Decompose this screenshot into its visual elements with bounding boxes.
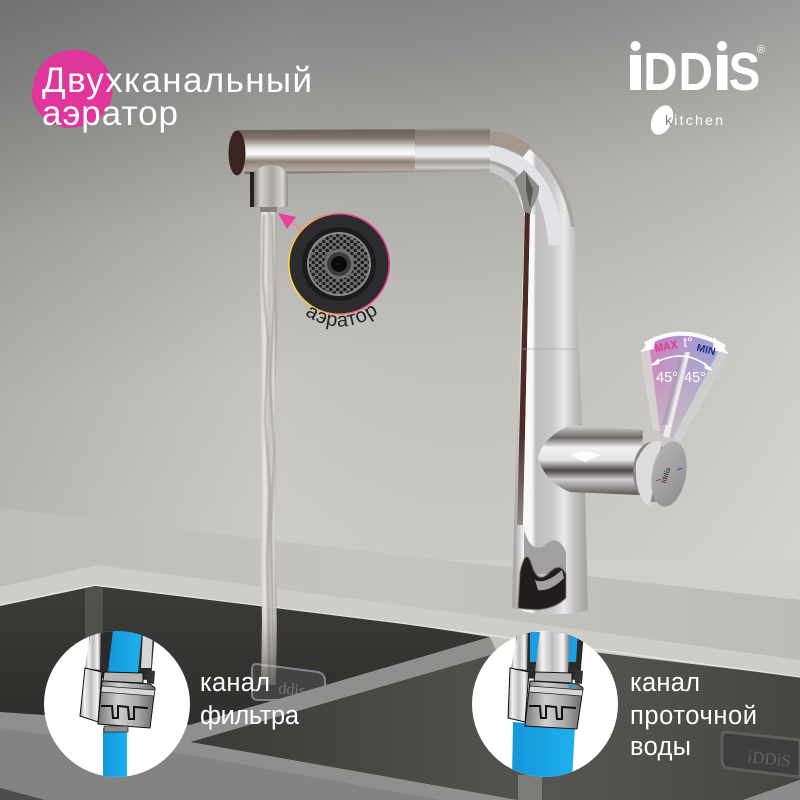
elbow outer band — [480, 130, 573, 227]
aerator nozzle — [260, 207, 277, 212]
right basin — [190, 642, 800, 800]
base reflection dark — [518, 557, 566, 610]
iddis kitchen logo — [629, 41, 765, 138]
spout end opening — [228, 130, 246, 176]
elbow beige band — [470, 138, 527, 152]
left basin — [0, 586, 490, 725]
elbow light band — [470, 151, 556, 245]
drain plaque right: iDDiS — [747, 747, 792, 771]
disc markings — [656, 467, 682, 484]
base reflection grey — [524, 530, 566, 574]
label: flow water channel: проточной — [630, 702, 757, 730]
collar — [252, 165, 288, 207]
t degree label: t° — [683, 334, 693, 350]
cutaway illustration — [508, 630, 584, 780]
disc markings: iddis — [661, 467, 672, 484]
lever body — [538, 425, 643, 495]
translucent fan — [640, 335, 729, 440]
drain plaque left: ddis — [278, 680, 306, 700]
pink blob — [32, 50, 113, 128]
drain plaque left — [252, 664, 325, 700]
column seam — [523, 348, 578, 350]
label: filter channel: фильтра — [200, 702, 300, 730]
MIN label: MIN — [695, 342, 717, 358]
label: filter channel: канал — [200, 669, 270, 697]
sink rim — [0, 565, 800, 680]
white circle — [472, 631, 618, 777]
base highlight — [535, 570, 564, 590]
title text: Двухканальный — [42, 61, 312, 100]
aerator callout — [278, 213, 390, 330]
label: flow water channel: канал — [630, 669, 700, 697]
lever disc — [647, 439, 691, 509]
lower water streak — [518, 775, 542, 800]
elbow reflection — [514, 170, 539, 216]
horizontal spout — [237, 129, 415, 174]
divider and front rim — [0, 637, 517, 800]
faucet — [228, 128, 691, 615]
iddis kitchen logo: iDDiS — [629, 41, 760, 102]
MAX label: MAX — [654, 339, 679, 355]
column dark stripe — [517, 212, 530, 525]
ghost lever positions — [640, 350, 660, 432]
outer arrow arc — [645, 334, 725, 347]
inset: filter channel — [44, 630, 190, 778]
iddis kitchen logo: ® — [757, 44, 765, 56]
water stream — [260, 210, 277, 685]
white circle — [44, 631, 190, 777]
inset: flow water channel — [472, 630, 618, 780]
title text: аэратор — [42, 94, 178, 133]
aerator circle — [288, 213, 390, 315]
kitchen counter and sink — [0, 508, 800, 800]
45 left: 45° — [656, 370, 678, 386]
countertop — [0, 508, 800, 800]
column and elbow body — [480, 128, 588, 615]
inner arrow arc — [653, 356, 711, 369]
drain plaque right — [722, 732, 800, 777]
left basin reflection streaks — [85, 587, 103, 637]
temperature fan diagram — [640, 334, 729, 442]
front rim shading — [0, 728, 440, 800]
aerator label: аэратор — [306, 306, 376, 330]
cutaway illustration — [80, 630, 155, 778]
title — [32, 50, 312, 133]
lever cap rear — [633, 442, 671, 502]
iddis kitchen logo: kitchen — [665, 112, 723, 128]
45 right: 45° — [684, 370, 706, 386]
pointer arrow — [278, 213, 303, 231]
elbow inner band — [480, 166, 520, 190]
label: flow water channel: воды — [630, 733, 691, 761]
